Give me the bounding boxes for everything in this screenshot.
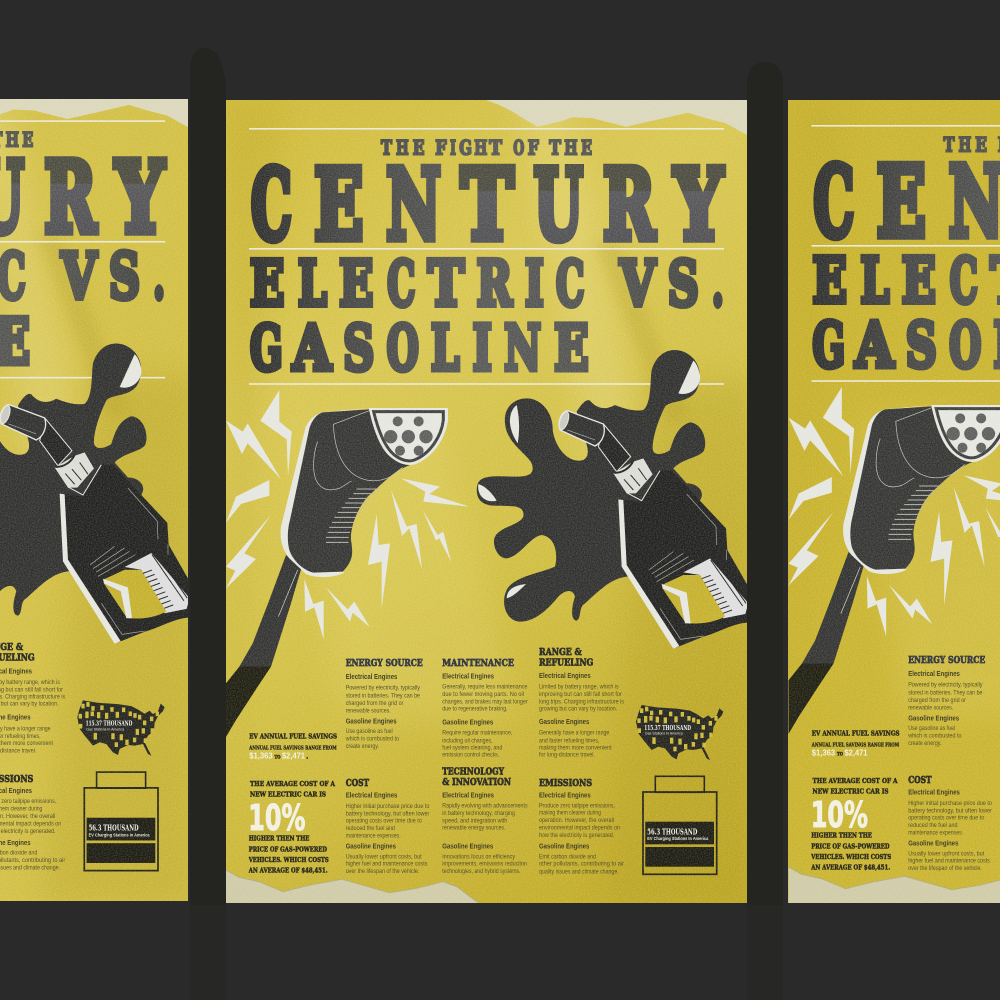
text block: energy source: charged from the grid or: [346, 700, 404, 707]
title: electric vs.: L: [298, 247, 327, 320]
text block: emissions: how the electricity is generated.: [539, 832, 614, 839]
right poster savings stats: $1,363: [812, 748, 835, 758]
text block: range and refueling: and faster refueling times,: [539, 737, 599, 744]
text block: maintenance: Electrical Engines: [442, 671, 494, 680]
text block: emissions: making them cleaner during: [539, 810, 601, 817]
text block: cost: Usually lower upfront costs, but: [346, 853, 422, 860]
title: the fight of the: E: [413, 136, 424, 159]
left poster map text: Gas Stations In America: [86, 727, 124, 731]
nozzle collar: [613, 458, 653, 493]
text block: energy source: Gasoline Engines: [346, 716, 397, 725]
right poster cost stat: 10%: [811, 795, 868, 836]
text block: energy source: Use gasoline as fuel: [346, 728, 393, 735]
map label: 115.37 thousand: 115.37 THOUSAND: [644, 724, 691, 732]
title: gasoline: A: [292, 312, 332, 385]
stat: 10 percent higher cost: [248, 780, 336, 875]
text block: emissions: environmental impact depends on: [539, 824, 620, 831]
paper folds and torn edges: [226, 90, 760, 910]
right poster savings stats: [811, 729, 900, 758]
horizontal rules: [249, 128, 724, 385]
stat: 10 percent higher cost: HIGHER THEN THE: [249, 835, 309, 843]
text block: technology and innovation: Rapidly evolving with advancements: [442, 803, 528, 810]
text block: technology and innovation: improvements, emissions reduction: [442, 861, 527, 868]
map label: 115.37 thousand: [644, 724, 691, 736]
lightning bolts: [226, 390, 469, 639]
icon: electric plug with lightning bolts: [226, 390, 469, 737]
text block: maintenance: emission control checks.: [442, 752, 499, 759]
text block: technology and innovation: Electrical Engines: [442, 790, 494, 799]
plug cable: [226, 555, 301, 737]
stat: 10 percent higher cost: THE AVERAGE COST OF A: [250, 780, 336, 788]
plug grip hatching: [326, 489, 379, 542]
text block: range and refueling: for long-distance travel.: [539, 752, 595, 759]
text block: range and refueling: Generally have a longer range: [539, 730, 610, 737]
text block: emissions: quality issues and climate change.: [539, 868, 619, 875]
title: electric vs.: C: [556, 247, 584, 320]
title: the fight of the: I: [450, 136, 456, 159]
text block: cost: Gasoline Engines: [346, 842, 396, 851]
right poster cost stat: THE AVERAGE COST OF A: [812, 777, 898, 785]
text block: maintenance: MAINTENANCE: [442, 659, 514, 669]
stat: 10 percent higher cost: AN AVERAGE OF $48,451.: [248, 867, 328, 875]
text block: range and refueling: RANGE &: [539, 648, 582, 658]
nozzle trigger window: [662, 557, 748, 624]
right poster gasoline fragment: A: [854, 309, 894, 382]
stat: 10 percent higher cost: PRICE OF GAS-POWERED: [249, 845, 327, 853]
can label: 56.3 thousand: 56.3 THOUSAND: [647, 826, 697, 836]
text block: maintenance: fuel system cleaning, and: [442, 745, 503, 752]
right poster column: energy source: Gasoline Engines: [908, 713, 959, 722]
text block: maintenance: changes, and brakes may last longer: [442, 698, 528, 705]
stat: ev annual fuel savings: [249, 732, 337, 761]
usa silhouette: [636, 705, 723, 760]
right poster column: energy source: renewable sources.: [908, 704, 953, 711]
stat: ev annual fuel savings: .: [306, 753, 308, 761]
text block: range and refueling: REFUELING: [539, 658, 593, 668]
text block: cost: higher fuel and maintenance costs: [346, 861, 428, 868]
title: electric vs.: S: [668, 247, 699, 320]
title: gasoline: S: [343, 312, 374, 385]
title: electric vs.: I: [525, 247, 544, 320]
text block: maintenance: Generally, require less maintenance: [442, 684, 528, 691]
left poster column: range and refueling: [0, 643, 66, 754]
text block: technology and innovation: [442, 767, 528, 875]
title: century: C: [251, 148, 292, 262]
text block: energy source: which is combusted to: [345, 736, 399, 743]
right poster column: energy source: Powered by electricity, typically: [908, 682, 983, 689]
paper base: [226, 100, 747, 903]
text block: cost: operating costs over time due to: [346, 818, 422, 825]
right poster cost stat: AN AVERAGE OF $48,451.: [810, 864, 890, 872]
plug body outline: [281, 408, 369, 577]
nozzle handle body: [620, 471, 749, 647]
text block: cost: battery technology, but often lower: [346, 810, 430, 817]
right poster headline fragment: C: [814, 144, 854, 258]
text block: maintenance: due to regenerative braking.: [442, 706, 508, 713]
right poster subtitle fragment: E: [902, 244, 936, 317]
right poster subtitle fragment: C: [950, 244, 978, 317]
can label: 56.3 thousand: [647, 826, 709, 841]
text block: cost: Electrical Engines: [346, 790, 397, 799]
title: the fight of the: O: [513, 136, 524, 159]
text block: emissions: Produce zero tailpipe emissions,: [539, 802, 615, 809]
text block: cost: COST: [346, 779, 369, 789]
stat: ev annual fuel savings: EV ANNUAL FUEL SAVINGS: [249, 732, 337, 740]
left poster map text: 115.37 THOUSAND: [86, 720, 132, 728]
left poster kicker fragment: H: [6, 129, 19, 152]
right poster column: cost: [908, 776, 993, 872]
left poster kicker fragment: E: [22, 129, 33, 152]
text block: range and refueling: growing but can vary by location.: [539, 705, 617, 712]
right poster savings stats: EV ANNUAL FUEL SAVINGS: [812, 729, 900, 737]
text block: cost: maintenance expenses.: [346, 832, 401, 839]
right poster column: energy source: Electrical Engines: [908, 669, 960, 678]
right poster gasoline fragment: S: [906, 309, 937, 382]
plug contour lines: [314, 411, 403, 490]
text block: emissions: other pollutants, contributing to air: [539, 861, 625, 868]
text block: range and refueling: [539, 648, 625, 759]
right poster column: energy source: [907, 656, 985, 747]
right poster subtitle fragment: E: [812, 244, 847, 317]
text block: technology and innovation: technologies, and hybrid systems.: [442, 868, 521, 875]
plug head with pins: [369, 408, 448, 465]
left poster subtitle fragment: V: [61, 240, 98, 313]
text block: energy source: [345, 659, 423, 750]
right poster column: cost: reduced the fuel and: [908, 822, 958, 829]
text block: technology and innovation: TECHNOLOGY: [442, 767, 504, 777]
text block: energy source: renewable sources.: [346, 707, 391, 714]
text block: range and refueling: making them more convenient: [539, 744, 612, 751]
text block: maintenance: including oil changes,: [442, 737, 493, 744]
left poster can text: [88, 824, 150, 838]
text block: maintenance: Gasoline Engines: [442, 718, 493, 727]
right poster cost stat: VEHICLES. WHICH COSTS: [810, 853, 891, 861]
right poster cost stat: NEW ELECTRIC CAR IS: [812, 788, 889, 796]
left poster subtitle fragment: S: [109, 240, 140, 313]
can label: 56.3 thousand: EV Charging Stations In America: [647, 836, 709, 841]
text block: emissions: EMISSIONS: [539, 779, 592, 789]
title: electric vs.: C: [387, 247, 415, 320]
stat: 10 percent higher cost: 10%: [248, 798, 306, 839]
right poster savings stats: $2,471: [844, 748, 868, 758]
text block: emissions: Emit carbon dioxide and: [539, 853, 596, 860]
text block: maintenance: Require regular maintenance,: [442, 730, 512, 737]
title: gasoline: L: [431, 312, 459, 385]
left poster headline fragment: R: [44, 140, 97, 254]
map of gas stations: [636, 705, 723, 760]
right poster column: cost: over the lifespan of the vehicle.: [908, 865, 982, 872]
left pillar: [190, 48, 226, 1000]
text block: cost: reduced the fuel and: [346, 825, 395, 832]
title: gasoline: G: [250, 312, 283, 385]
text block: technology and innovation: Innovations focus on efficiency: [442, 853, 516, 860]
stat: ev annual fuel savings: $1,363: [249, 751, 273, 761]
right poster column: cost: Gasoline Engines: [908, 839, 958, 848]
text block: energy source: stored in batteries. They can be: [346, 692, 420, 699]
right poster column: energy source: which is combusted to: [907, 733, 962, 740]
right poster column: cost: COST: [908, 776, 932, 786]
text block: emissions: [539, 779, 625, 875]
right poster column: cost: Electrical Engines: [908, 787, 960, 796]
title: electric vs.: .: [712, 247, 724, 320]
left poster subtitle fragment: .: [153, 240, 165, 313]
left poster can text: 56.3 THOUSAND: [89, 822, 139, 832]
right poster gasoline fragment: G: [812, 309, 845, 382]
right poster kicker fragment: E: [975, 133, 987, 156]
title: gasoline: N: [504, 312, 541, 385]
title: electric vs.: E: [339, 247, 373, 320]
title: the fight of the: T: [381, 136, 393, 159]
right poster column: energy source: create energy.: [908, 740, 942, 747]
text block: energy source: ENERGY SOURCE: [346, 659, 423, 669]
map label: 115.37 thousand: Gas Stations In America: [645, 732, 683, 736]
text block: technology and innovation: & INNOVATION: [442, 778, 511, 788]
nozzle white strip: [618, 499, 679, 649]
title: the fight of the: H: [474, 136, 487, 159]
right poster headline fragment: E: [877, 144, 926, 258]
text block: technology and innovation: speed, and integration with: [442, 817, 508, 824]
title: the fight of the: T: [549, 136, 562, 159]
text block: technology and innovation: renewable energy sources.: [442, 825, 506, 832]
right poster kicker fragment: H: [958, 133, 971, 156]
right poster kicker fragment: T: [944, 133, 955, 156]
right poster column: energy source: Use gasoline as fuel: [908, 725, 956, 732]
text block: range and refueling: Electrical Engines: [539, 671, 591, 680]
text block: emissions: Gasoline Engines: [539, 842, 589, 851]
text block: energy source: Powered by electricity, typically: [346, 685, 421, 692]
text block: technology and innovation: Gasoline Engines: [442, 842, 493, 851]
title: the fight of the: G: [459, 136, 472, 159]
title: gasoline: O: [387, 312, 419, 385]
title: gasoline: E: [554, 312, 589, 385]
left poster column: emissions: [0, 775, 66, 872]
text block: energy source: create energy.: [346, 743, 379, 750]
right poster column: energy source: ENERGY SOURCE: [908, 656, 985, 666]
title: century: U: [534, 148, 583, 262]
title: the fight of the: T: [489, 136, 503, 159]
title: century: R: [603, 148, 655, 262]
right poster column: cost: operating costs over time due to: [908, 815, 985, 822]
text block: range and refueling: improving but can still fall short for: [539, 691, 622, 698]
text block: range and refueling: long trips. Charging infrastructure is: [539, 698, 625, 705]
plug body: [288, 409, 410, 573]
left poster map text: [86, 720, 132, 730]
right poster subtitle fragment: L: [860, 244, 889, 317]
stat: 10 percent higher cost: NEW ELECTRIC CAR IS: [250, 791, 326, 799]
nozzle spout: [557, 411, 631, 472]
text block: cost: over the lifespan of the vehicle.: [346, 868, 420, 875]
text block: range and refueling: Limited by battery range, which is: [539, 684, 619, 691]
title: the fight of the: F: [528, 136, 539, 159]
right poster column: cost: Usually lower upfront costs, but: [908, 850, 984, 857]
right poster cost stat: PRICE OF GAS-POWERED: [811, 842, 890, 850]
right poster cost stat: HIGHER THEN THE: [811, 832, 872, 840]
nozzle detail lines: [649, 494, 727, 639]
right pillar: [747, 62, 783, 1000]
title: electric vs.: E: [250, 247, 284, 320]
station markers: [637, 707, 718, 751]
title: century: Y: [674, 148, 723, 262]
icon: fuel nozzle with oil splat: [477, 350, 749, 649]
title: century: N: [386, 148, 441, 262]
panel: center poster: [226, 90, 760, 910]
oil splat: [477, 350, 705, 622]
panel: left poster: [0, 82, 201, 907]
title: electric vs.: R: [477, 247, 512, 320]
right poster column: energy source: charged from the grid or: [908, 697, 967, 704]
stat: 10 percent higher cost: VEHICLES. WHICH COSTS: [248, 856, 329, 864]
stat: ev annual fuel savings: TO: [274, 755, 280, 761]
title: electric vs.: T: [428, 247, 464, 320]
title: century: T: [461, 148, 513, 262]
text block: cost: [346, 779, 430, 875]
title: electric vs.: V: [619, 247, 656, 320]
right poster column: energy source: stored in batteries. They can be: [908, 689, 983, 696]
title: the fight of the: E: [581, 136, 592, 159]
text block: emissions: operation. However, the overall: [539, 817, 614, 824]
right poster savings stats: TO: [837, 752, 843, 758]
text block: emissions: Electrical Engines: [539, 790, 591, 799]
title: century: E: [314, 148, 363, 262]
text block: range and refueling: Gasoline Engines: [539, 717, 589, 726]
title: gasoline: I: [473, 312, 492, 385]
stat: ev annual fuel savings: ANNUAL FUEL SAVINGS RANGE FROM: [249, 745, 337, 751]
left poster headline fragment: Y: [115, 140, 165, 254]
text block: maintenance: due to fewer moving parts. No oil: [442, 691, 524, 698]
left poster can text: EV Charging Stations In America: [89, 832, 150, 837]
text block: energy source: Electrical Engines: [346, 672, 397, 681]
right poster cost stat: [810, 777, 898, 872]
jerry can chart: [643, 776, 717, 874]
title: the fight of the: H: [396, 136, 409, 159]
text block: cost: Higher initial purchase price due to: [346, 803, 430, 810]
text block: maintenance: [442, 659, 528, 759]
text block: technology and innovation: in battery technology, charging: [442, 810, 515, 817]
panel: right poster: [788, 87, 1000, 907]
right poster savings stats: ANNUAL FUEL SAVINGS RANGE FROM: [811, 742, 899, 748]
title: the fight of the: F: [435, 136, 447, 159]
title: the fight of the: H: [564, 136, 578, 159]
splat highlights: [478, 361, 700, 598]
right poster column: cost: maintenance expenses.: [908, 829, 963, 836]
stat: ev annual fuel savings: $2,471: [282, 751, 305, 761]
